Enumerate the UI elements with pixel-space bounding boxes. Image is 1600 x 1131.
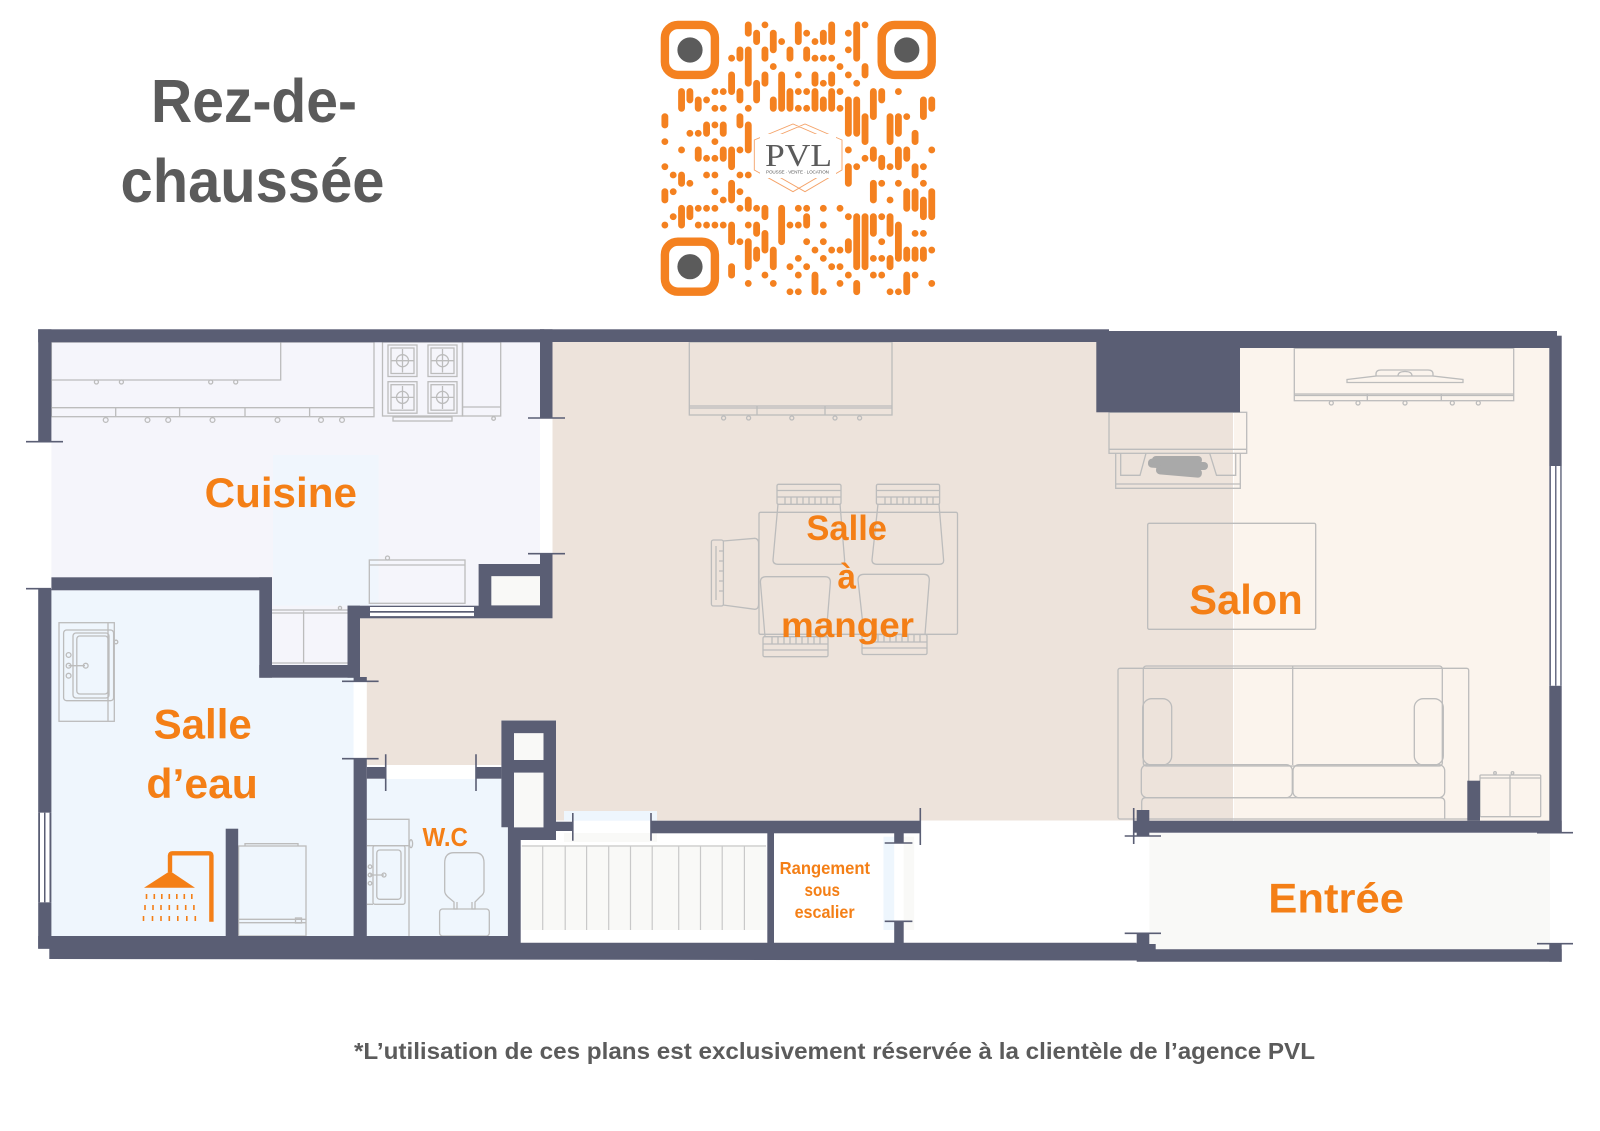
label: Salle a manger: Salle (806, 509, 887, 548)
floor plan (26, 329, 1573, 962)
furniture: sofa (1118, 666, 1469, 819)
floor: salle d'eau (51, 590, 354, 936)
floor: cuisine pale zone (273, 455, 379, 606)
window: kitchen strip (370, 607, 474, 616)
title: chaussée (120, 147, 384, 215)
chair 2 (872, 484, 944, 564)
furniture: kitchen (51, 342, 501, 663)
furniture: washing machine (239, 844, 306, 936)
floor: salle a manger (360, 342, 1233, 820)
furniture: side cabinet (1480, 772, 1541, 817)
label: Cuisine: Cuisine (205, 469, 357, 516)
label: Rangement sous escalier: sous (804, 880, 840, 900)
TV (1347, 370, 1463, 382)
label: Salle d'eau: d’eau (146, 760, 258, 807)
QR logo PVL: POUSSE · VENTE · LOCATION (766, 170, 829, 174)
furniture: W.C sink (367, 819, 413, 936)
inner box fills (491, 576, 544, 827)
window: right salon (1549, 466, 1562, 686)
footer note: *L’utilisation de ces plans est exclusivement réservée à la clientèle de l’agence PVL (354, 1038, 1315, 1064)
label: Salle d'eau: Salle (154, 701, 252, 748)
chair 4 (858, 574, 929, 654)
fireplace logs (1148, 456, 1208, 478)
title: Rez-de- (151, 67, 357, 135)
chair 3 (760, 577, 830, 657)
furniture: fireplace (1109, 412, 1247, 488)
furniture: TV stand (1294, 348, 1514, 405)
label: Salle a manger: à (838, 558, 857, 597)
furniture: dining table and chairs (711, 484, 958, 657)
window: left bathroom (38, 813, 51, 902)
floor: cuisine (51, 342, 540, 665)
QR modules (665, 25, 932, 292)
QR logo PVL (752, 122, 844, 194)
furniture: coffee table (1148, 523, 1316, 629)
label: Salle a manger (781, 509, 914, 645)
label: Rangement sous escalier: escalier (795, 902, 855, 922)
furniture: toilet (440, 853, 489, 936)
furniture: bathroom sink (59, 623, 118, 721)
room labels (146, 469, 1404, 922)
furniture: dining sideboard (689, 342, 892, 420)
floor: W.C (367, 779, 508, 936)
floor: pale window panels (564, 811, 914, 930)
QR finder patterns (665, 25, 932, 292)
door and opening ticks (26, 418, 1573, 944)
icon: shower (144, 853, 211, 922)
label: Salon: Salon (1189, 576, 1303, 623)
floor: salon (1234, 348, 1549, 821)
label: Rangement sous escalier (780, 858, 870, 922)
label: Entree: Entrée (1268, 875, 1404, 922)
windows (38, 466, 1562, 902)
QR logo PVL: PVL (765, 137, 832, 173)
label: Rangement sous escalier: Rangement (780, 858, 870, 878)
label: Salle d'eau (146, 701, 258, 807)
label: Salle a manger: manger (781, 606, 914, 645)
title (120, 67, 384, 215)
QR finder centres (677, 37, 919, 279)
chair 5 (711, 538, 759, 609)
QR code (665, 25, 932, 292)
walls (38, 329, 1562, 962)
label: W.C: W.C (422, 822, 468, 852)
floor: entree (1149, 833, 1550, 950)
stairs (522, 845, 767, 930)
room floors (51, 342, 1550, 950)
chair 1 (773, 484, 845, 564)
